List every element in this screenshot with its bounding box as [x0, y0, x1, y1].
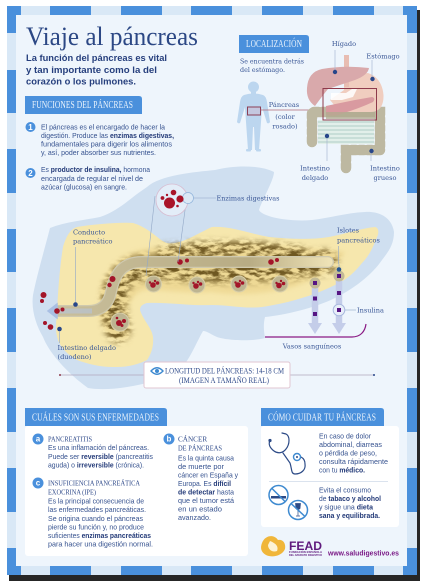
disease a: aguda) o irreversible (crónica). — [48, 460, 144, 470]
disease c: Se origina cuando el páncreas — [48, 514, 143, 523]
pancreatic duct — [48, 262, 328, 318]
label: páncreas: Páncreas — [269, 101, 300, 109]
disease b: DE PÁNCREAS — [178, 442, 222, 452]
function 1 text: 1 — [28, 123, 33, 132]
disease b: Europa. Es difícil — [178, 479, 231, 488]
disease c: para hacer una digestión normal. — [48, 540, 153, 548]
stomach — [330, 55, 384, 112]
organ labels: Estómago — [366, 52, 400, 60]
red locator box — [323, 88, 376, 120]
organ labels: delgado — [302, 174, 328, 182]
subtitle: corazón o los pulmones. — [26, 76, 136, 86]
disease c — [32, 478, 153, 548]
organ labels: grueso — [374, 174, 396, 182]
logo: FEAD: FUNDACIÓN ESPAÑOLA — [289, 551, 322, 554]
title: Viaje al páncreas — [26, 22, 198, 51]
label: islotes pancreáticos: Islotes — [337, 226, 360, 234]
subtitle: y tan importante como la del — [26, 65, 157, 75]
label: vasos sanguíneos: Vasos sanguíneos — [282, 342, 342, 350]
panel: enfermedades: CUÁLES SON SUS ENFERMEDADES — [32, 412, 159, 424]
label: páncreas: rosado) — [272, 122, 298, 130]
blue duodenum background — [33, 166, 394, 389]
localización text: del estómago. — [240, 66, 285, 74]
panel: cuidados: CÓMO CUIDAR TU PÁNCREAS — [268, 412, 376, 424]
heading: funciones del páncreas: FUNCIONES DEL PÁNCREAS — [32, 99, 133, 111]
label: conducto pancreático: pancreático — [73, 238, 113, 246]
localización text — [240, 58, 305, 74]
label: páncreas: (color — [275, 113, 296, 121]
label: intestino delgado (duodeno) — [57, 327, 116, 361]
organ labels: Hígado — [332, 40, 356, 48]
disease a: Puede ser reversible (pancreatitis — [48, 452, 153, 461]
disease b — [164, 434, 238, 522]
function 1 text — [26, 122, 174, 157]
panel: enfermedades — [25, 408, 248, 556]
disease a: a — [36, 434, 41, 444]
function 1 text: y, así, poder absorber sus nutrientes. — [41, 148, 156, 157]
disease a: Es una inflamación del páncreas. — [48, 443, 149, 452]
disease a — [32, 434, 153, 470]
large intestine — [312, 112, 380, 168]
label: enzimas digestivas: Enzimas digestivas — [216, 194, 280, 202]
icon: no smoking — [269, 486, 288, 504]
disease b: avanzado. — [178, 513, 211, 522]
care text 1 — [319, 432, 388, 474]
function 2 text: encargada de regular el nivel de — [41, 174, 143, 183]
care text 2: de tabaco y alcohol — [319, 494, 381, 503]
care text 2: sana y equilibrada. — [319, 511, 380, 520]
disease c: las enfermedades pancreáticas. — [48, 505, 146, 514]
disease c: EXOCRINA (IPE) — [48, 488, 97, 496]
logo: FEAD: FEAD — [289, 539, 322, 553]
care text 1: o pérdida de peso, — [319, 448, 377, 458]
small intestine — [318, 120, 374, 144]
organ labels: Intestino — [370, 164, 400, 172]
care text 2 — [319, 486, 381, 520]
care text 2: y sigue una dieta — [319, 502, 374, 512]
heading: localización — [239, 35, 309, 53]
localización text: Se encuentra detrás — [240, 58, 305, 66]
disease c: Es la principal consecuencia de — [48, 496, 144, 506]
function 1 text: fundamentales para digerir los alimentos — [41, 140, 172, 148]
disease b: de muerte por — [178, 462, 225, 471]
disease b: b — [167, 434, 172, 444]
length scale — [59, 362, 375, 388]
care text 1: con tu médico. — [319, 466, 365, 474]
pancreas mini — [326, 97, 374, 116]
care text 1: consulta rápidamente — [319, 457, 388, 466]
icon: stethoscope — [269, 433, 305, 474]
function 2 text: Es productor de insulina, hormona — [41, 165, 151, 174]
function 2 text — [26, 165, 151, 192]
care text 1: En caso de dolor — [319, 432, 372, 440]
care text 2: Evita el consumo — [319, 486, 371, 494]
disease c: INSUFICIENCIA PANCREÁTICA — [48, 478, 141, 488]
panel: cuidados — [261, 408, 399, 527]
disease b: que el tumor está — [178, 496, 235, 505]
disease b: Es la quinta causa — [178, 454, 235, 462]
website: www.saludigestivo.es — [327, 548, 399, 558]
islets and insulin arrows — [308, 264, 356, 334]
human silhouette — [237, 82, 270, 152]
pancreas body — [56, 223, 378, 367]
function 2 text: azúcar (glucosa) en sangre. — [41, 182, 127, 192]
length scale: LONGITUD DEL PÁNCREAS: 14-18 CM — [165, 366, 284, 376]
organ labels: Intestino — [300, 164, 330, 172]
disease a: PANCREATITIS — [48, 436, 92, 444]
disease c: pierde su función y, no produce — [48, 522, 144, 532]
icon: eye — [151, 368, 163, 374]
disease b: cáncer en España y — [178, 470, 238, 480]
heading: localización: LOCALIZACIÓN — [246, 38, 302, 50]
liver — [307, 67, 369, 106]
care text 1: abdominal, diarreas — [319, 440, 382, 449]
heading: funciones del páncreas — [25, 96, 142, 114]
disease b: en un estado — [178, 504, 222, 514]
function 1 text: digestión. Produce las enzimas digestivas, — [41, 131, 174, 140]
organ labels — [300, 40, 400, 182]
label: islotes pancreáticos: pancreáticos — [337, 236, 380, 244]
function 1 text: El páncreas es el encargado de hacer la — [41, 122, 166, 132]
pancreas marker on silhouette — [248, 107, 323, 115]
disease c: suficientes enzimas pancreáticas — [48, 531, 151, 540]
label: intestino delgado (duodeno): (duodeno) — [58, 353, 92, 361]
logo: FEAD — [261, 536, 322, 557]
label: páncreas — [269, 101, 300, 130]
enzyme clusters in duct and duodenum — [40, 258, 279, 330]
label: islotes pancreáticos — [337, 226, 380, 244]
enzyme magnifier callout — [146, 184, 216, 276]
subtitle — [26, 53, 167, 86]
disease b: CÁNCER — [178, 434, 207, 444]
organs — [307, 55, 384, 168]
acinus groups — [111, 276, 288, 331]
subtitle: La función del páncreas es vital — [26, 53, 167, 63]
label: conducto pancreático: Conducto — [73, 228, 105, 236]
texture of pancreatic lobes — [114, 248, 325, 330]
label: intestino delgado (duodeno): Intestino delgado — [58, 344, 116, 352]
length scale: (IMAGEN A TAMAÑO REAL) — [179, 375, 269, 385]
disease b: de detectar hasta — [178, 488, 235, 496]
organ pointers — [325, 50, 375, 161]
label: insulina: Insulina — [357, 306, 384, 314]
blood vessel line — [265, 324, 366, 337]
disease c: c — [36, 478, 41, 488]
icon: no alcohol — [288, 500, 308, 520]
function 2 text: 2 — [28, 169, 33, 178]
label: conducto pancreático — [73, 228, 113, 307]
logo: FEAD: DEL APARATO DIGESTIVO — [289, 554, 322, 557]
